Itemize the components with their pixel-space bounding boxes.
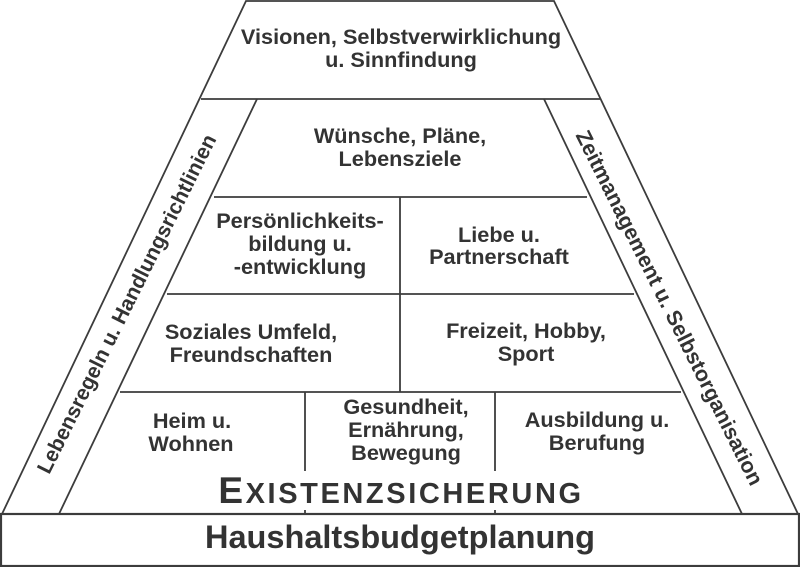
cell: education: Ausbildung u.: [525, 407, 669, 432]
cell: leisure: Sport: [498, 341, 554, 366]
cell: home: Wohnen: [148, 431, 234, 456]
right side label: Zeitmanagement u. Selbstorganisation: [571, 126, 768, 489]
cell: home: Heim u.: [153, 408, 231, 433]
cell: personality development: bildung u.: [248, 231, 352, 256]
left side label: Lebensregeln u. Handlungsrichtlinien: [33, 131, 221, 477]
cell: education: Berufung: [549, 430, 645, 455]
cell: social environment: Soziales Umfeld,: [165, 319, 337, 344]
cell: health: Bewegung: [351, 440, 461, 465]
tier: wishes and plans: Wünsche, Pläne,: [314, 123, 486, 148]
cell: health: Ernährung,: [348, 417, 464, 442]
heading: existence security: EXISTENZSICHERUNG: [218, 470, 584, 511]
cell: love and partnership: Liebe u.: [458, 222, 540, 247]
base bar: budget planning: [1, 514, 799, 566]
cell: love and partnership: Partnerschaft: [429, 244, 569, 269]
top tier: visions: u. Sinnfindung: [325, 47, 477, 72]
cell: social environment: Freundschaften: [170, 342, 332, 367]
cell: personality development: Persönlichkeits-: [216, 208, 384, 233]
tier: wishes and plans: Lebensziele: [339, 146, 461, 171]
top tier: visions: Visionen, Selbstverwirklichung: [241, 24, 561, 49]
cell: leisure: Freizeit, Hobby,: [446, 318, 606, 343]
cell: health: Gesundheit,: [343, 394, 469, 419]
cell: personality development: -entwicklung: [234, 254, 366, 279]
base bar: budget planning: Haushaltsbudgetplanung: [205, 519, 595, 555]
